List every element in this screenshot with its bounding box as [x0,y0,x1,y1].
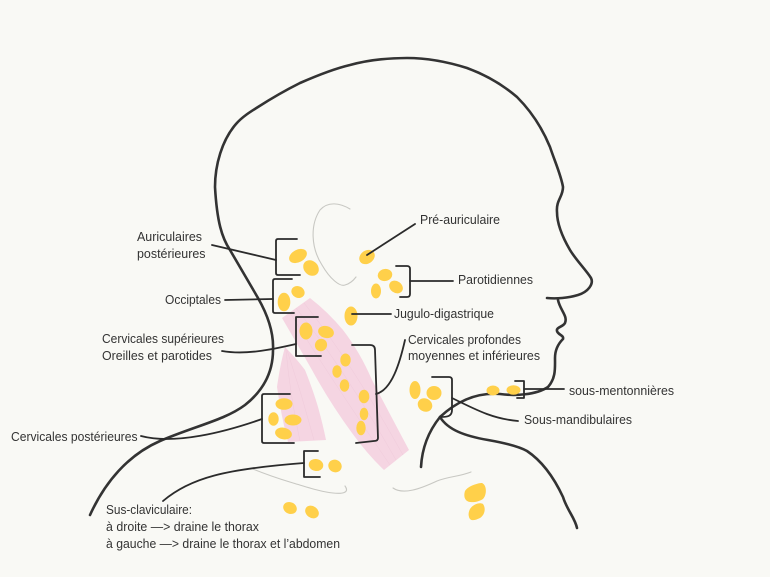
lymph nodes: cervicales postérieures [268,398,302,441]
label: cervicales supérieures [102,332,224,363]
label: cervicales supérieures: Cervicales supérieures [102,332,224,346]
label: cervicales postérieures: Cervicales postérieures [11,430,138,444]
lymph nodes: cervicales supérieures [300,322,335,353]
leader lines [141,224,564,501]
lymph node: jugulo-digastrique [344,306,358,326]
bracket: cervicales postérieures [262,394,294,443]
lymph nodes: occipitales [278,284,307,311]
label: sous-mandibulaires: Sous-mandibulaires [524,413,632,427]
lymph nodes: sus-claviculaire [281,458,344,521]
bracket: cervicales supérieures [296,317,321,356]
label: cervicales profondes: moyennes et inférieures [408,349,540,363]
lymph nodes: sous-mandibulaires [410,381,442,414]
bracket: occipitales [273,279,294,313]
muscle: sternocleidomastoid [282,298,409,470]
lymph node: pré-auriculaire [356,247,378,267]
head and neck outline [90,58,592,528]
label: auriculaires postérieures: Auriculaires [137,230,202,244]
label: cervicales supérieures: Oreilles et parotides [102,349,212,363]
lymph nodes: auriculaires postérieures [287,246,322,279]
label: cervicales profondes [408,333,540,363]
lymph nodes: sous-mentonnières [486,385,520,396]
label: sus-claviculaire: à droite —> draine le thorax [106,520,260,534]
label: sous-mentonnières: sous-mentonnières [569,384,674,398]
lymph nodes: cervicales profondes [332,354,369,435]
label: auriculaires postérieures [137,230,206,261]
label: jugulo-digastrique: Jugulo-digastrique [394,307,494,321]
bracket: sous-mentonnières [515,381,524,398]
muscle: trapezius [277,347,326,442]
label: cervicales profondes: Cervicales profondes [408,333,521,347]
label: sus-claviculaire [106,503,340,551]
bracket: parotidiennes [396,266,410,297]
label: pré-auriculaire: Pré-auriculaire [420,213,500,227]
label: parotidiennes: Parotidiennes [458,273,533,287]
bracket: auriculaires postérieures [276,239,300,275]
label: sus-claviculaire: à gauche —> draine le thorax et l’abdomen [106,537,340,551]
bracket: sous-mandibulaires [432,377,452,417]
lymph nodes: claviculaires droits [464,483,486,520]
label: sus-claviculaire: Sus-claviculaire: [106,503,192,517]
clavicle left [253,469,347,493]
bracket: sus-claviculaire [304,451,320,477]
label: auriculaires postérieures: postérieures [137,247,206,261]
label: occipitales: Occiptales [165,293,221,307]
ear [313,204,356,285]
bracket: cervicales profondes [352,345,378,443]
clavicle right [393,472,471,491]
lymph nodes: parotidiennes [371,268,405,298]
